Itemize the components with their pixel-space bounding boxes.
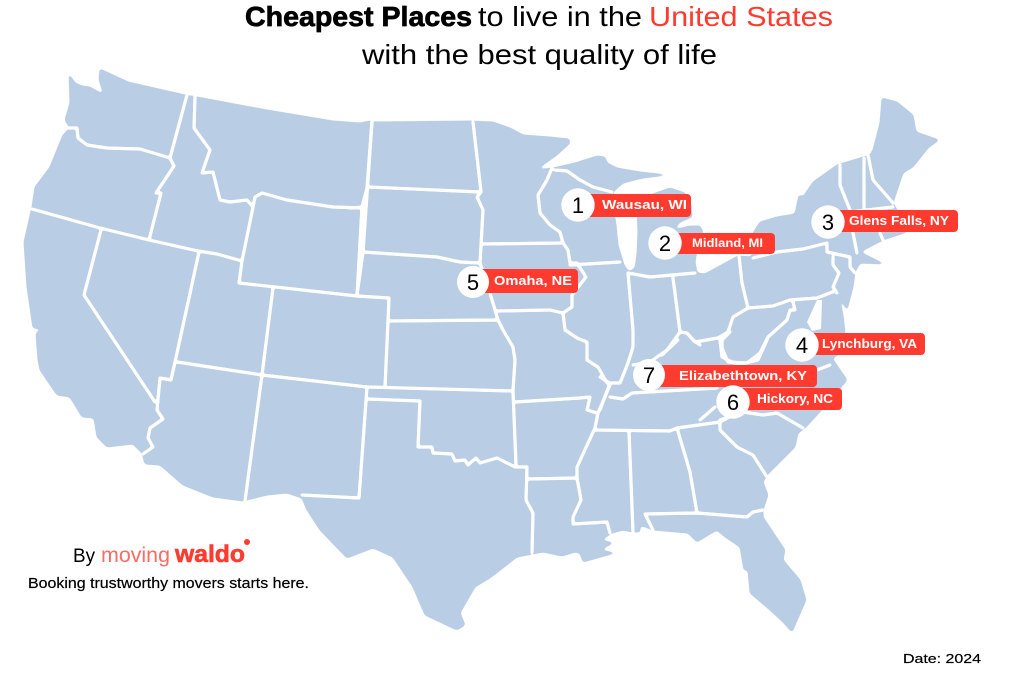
tagline: Booking trustworthy movers starts here. xyxy=(28,576,309,592)
title: Cheapest Places xyxy=(245,1,472,32)
date note: Date: 2024 xyxy=(903,651,981,666)
marker 7: Elizabethtown, KY xyxy=(633,359,817,391)
marker 2: Midland, MI: Midland, MI xyxy=(692,236,763,250)
marker 6: Hickory, NC xyxy=(716,385,842,419)
marker 5: Omaha, NE: 5 xyxy=(467,270,479,295)
logo: By moving waldo: moving xyxy=(101,544,170,567)
logo: By moving waldo xyxy=(73,539,250,568)
marker 1: Wausau, WI: Wausau, WI xyxy=(602,197,687,212)
marker 4: Lynchburg, VA xyxy=(785,328,925,362)
marker 4: Lynchburg, VA: 4 xyxy=(796,333,808,358)
title: United States xyxy=(649,1,833,32)
marker 5: Omaha, NE xyxy=(457,266,578,298)
marker 7: Elizabethtown, KY: Elizabethtown, KY xyxy=(679,368,807,383)
map: state borders xyxy=(32,95,893,553)
logo: By moving waldo: waldo xyxy=(174,541,245,568)
marker 6: Hickory, NC: Hickory, NC xyxy=(757,391,834,406)
marker 2: Midland, MI xyxy=(648,226,775,260)
title: to live in the xyxy=(478,1,642,32)
marker 1: Wausau, WI xyxy=(561,188,691,222)
marker 3: Glens Falls, NY: Glens Falls, NY xyxy=(849,213,949,228)
marker 6: Hickory, NC: 6 xyxy=(727,390,739,415)
marker 4: Lynchburg, VA: Lynchburg, VA xyxy=(822,336,918,351)
marker 1: Wausau, WI: 1 xyxy=(572,193,584,218)
logo: By moving waldo: By xyxy=(73,546,95,567)
marker 7: Elizabethtown, KY: 7 xyxy=(643,363,655,388)
marker 3: Glens Falls, NY xyxy=(811,205,958,239)
map: Chesapeake Bay xyxy=(807,300,822,331)
marker 5: Omaha, NE: Omaha, NE xyxy=(494,273,572,288)
title: with the best quality of life xyxy=(361,39,717,70)
map of the United States xyxy=(24,69,939,632)
marker 2: Midland, MI: 2 xyxy=(659,231,671,256)
marker 3: Glens Falls, NY: 3 xyxy=(822,210,834,235)
title xyxy=(245,1,833,70)
map: land silhouette xyxy=(24,69,939,632)
